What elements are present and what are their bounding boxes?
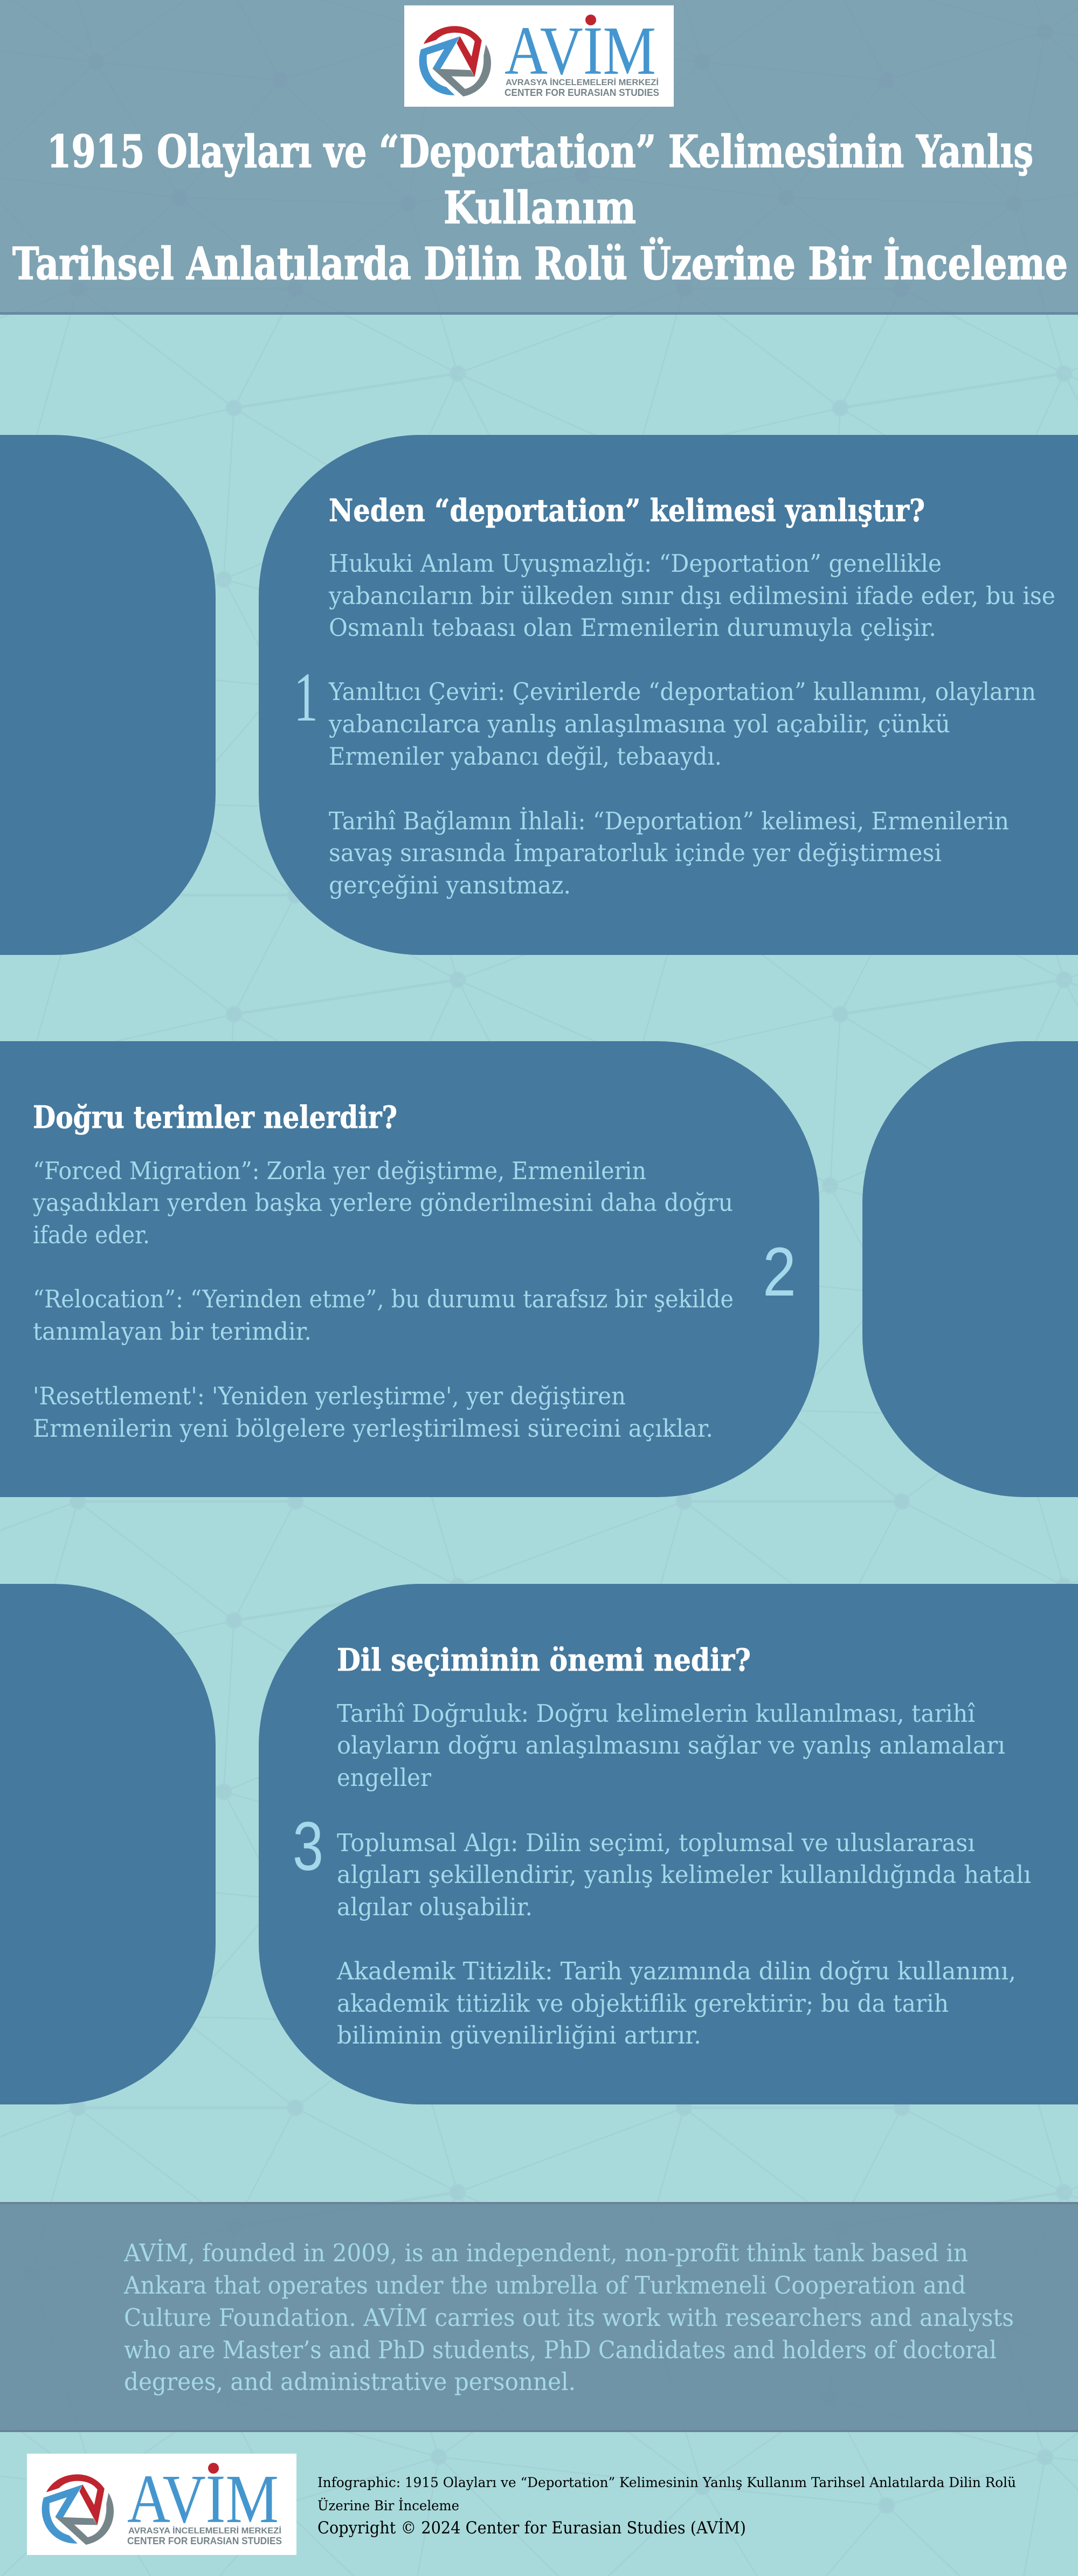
text: section 1 body: savaş sırasında İmparatorluk içinde yer değiştirmesi bbox=[329, 839, 942, 867]
panel: section 2 bbox=[0, 1041, 819, 1497]
text: section 2 body: tanımlayan bir terimdir. bbox=[33, 1317, 312, 1346]
number 1: 1 bbox=[294, 659, 318, 736]
text: section 1 body: Tarihî Bağlamın İhlali: “Deportation” kelimesi, Ermenilerin bbox=[329, 807, 1009, 835]
logo: header AVİM: CENTER FOR EURASIAN STUDIES bbox=[505, 87, 659, 98]
text: section 1 body: Osmanlı tebaası olan Ermenilerin durumuyla çelişir. bbox=[329, 613, 936, 642]
number 3: 3 bbox=[293, 1808, 323, 1885]
logo: header AVİM: AVİM bbox=[505, 12, 656, 89]
footer credit text bbox=[317, 2475, 1016, 2538]
text: section 3 body bbox=[336, 1699, 1031, 2049]
text: section 1 body: Yanıltıcı Çeviri: Çevirilerde “deportation” kullanımı, olayların bbox=[328, 677, 1036, 706]
text: section 1 body: yabancılarca yanlış anlaşılmasına yol açabilir, çünkü bbox=[328, 710, 950, 738]
text: section 2 body: ifade eder. bbox=[33, 1221, 150, 1249]
text: about AVİM bbox=[123, 2239, 1014, 2396]
panel: section 1 bbox=[259, 435, 1078, 955]
text: section 1 body: Hukuki Anlam Uyuşmazlığı: “Deportation” genellikle bbox=[329, 549, 942, 578]
text: section 3 body: biliminin güvenilirliğini artırır. bbox=[337, 2021, 701, 2049]
panel: header band bbox=[0, 0, 1078, 315]
text: about AVİM: AVİM, founded in 2009, is an independent, non-profit think tank based in bbox=[123, 2239, 968, 2267]
logo: footer AVİM: AVİM bbox=[127, 2461, 279, 2537]
footer credit text: Infographic: 1915 Olayları ve “Deportation” Kelimesinin Yanlış Kullanım Tarihsel Anlatılarda Dilin Rolü bbox=[317, 2475, 1016, 2490]
title bbox=[12, 126, 1068, 290]
heading: section 2: Doğru terimler nelerdir? bbox=[33, 1099, 397, 1135]
footer credit text: Copyright © 2024 Center for Eurasian Studies (AVİM) bbox=[317, 2517, 746, 2538]
text: section 3 body: engeller bbox=[337, 1763, 431, 1792]
logo: footer AVİM: AVRASYA İNCELEMELERİ MERKEZİ bbox=[128, 2526, 281, 2536]
panel: about band bbox=[0, 2202, 1078, 2432]
logo: header AVİM: AVRASYA İNCELEMELERİ MERKEZİ bbox=[506, 78, 659, 87]
text: about AVİM: who are Master’s and PhD students, PhD Candidates and holders of doctoral bbox=[124, 2336, 997, 2364]
text: section 3 body: algıları şekillendirir, yanlış kelimeler kullanıldığında hatalı bbox=[337, 1860, 1031, 1889]
text: section 2 body bbox=[32, 1157, 734, 1443]
footer credit text: Üzerine Bir İnceleme bbox=[317, 2498, 459, 2513]
text: section 3 body: algılar oluşabilir. bbox=[337, 1893, 533, 1921]
text: about AVİM: Culture Foundation. AVİM carries out its work with researchers and analysts bbox=[124, 2303, 1014, 2332]
text: section 3 body: olayların doğru anlaşılmasını sağlar ve yanlış anlamaları bbox=[337, 1731, 1005, 1760]
text: section 1 body: yabancıların bir ülkeden sınır dışı edilmesini ifade eder, bu ise bbox=[328, 581, 1055, 610]
heading: section 3: Dil seçiminin önemi nedir? bbox=[337, 1642, 751, 1678]
logo: header AVİM bbox=[404, 5, 674, 107]
text: section 3 body: Toplumsal Algı: Dilin seçimi, toplumsal ve uluslararası bbox=[337, 1829, 975, 1857]
text: section 1 body bbox=[328, 549, 1055, 899]
text: section 2 body: 'Resettlement': 'Yeniden yerleştirme', yer değiştiren bbox=[33, 1382, 626, 1410]
number 2: 2 bbox=[763, 1234, 796, 1311]
text: section 3 body: akademik titizlik ve objektiflik gerektirir; bu da tarih bbox=[337, 1989, 949, 2018]
title: Kullanım bbox=[444, 182, 636, 234]
heading: section 1: Neden “deportation” kelimesi yanlıştır? bbox=[329, 493, 925, 529]
text: about AVİM: degrees, and administrative personnel. bbox=[124, 2367, 576, 2396]
text: section 1 body: gerçeğini yansıtmaz. bbox=[329, 871, 571, 899]
panel: section 3 bbox=[259, 1584, 1078, 2104]
text: section 2 body: yaşadıkları yerden başka yerlere gönderilmesini daha doğru bbox=[32, 1188, 733, 1217]
text: section 3 body: Tarihî Doğruluk: Doğru kelimelerin kullanılması, tarihî bbox=[337, 1699, 976, 1728]
logo: footer AVİM: CENTER FOR EURASIAN STUDIES bbox=[127, 2535, 282, 2546]
text: section 2 body: “Forced Migration”: Zorla yer değiştirme, Ermenilerin bbox=[33, 1157, 646, 1185]
logo: footer AVİM bbox=[27, 2454, 296, 2555]
text: section 2 body: “Relocation”: “Yerinden etme”, bu durumu tarafsız bir şekilde bbox=[33, 1285, 734, 1313]
panel: section 1 side block bbox=[0, 435, 216, 955]
text: section 1 body: Ermeniler yabancı değil, tebaaydı. bbox=[329, 742, 722, 771]
panel: section 3 side block bbox=[0, 1584, 216, 2104]
text: section 2 body: Ermenilerin yeni bölgelere yerleştirilmesi sürecini açıklar. bbox=[33, 1414, 713, 1443]
panel: section 2 side block bbox=[862, 1041, 1078, 1497]
text: section 3 body: Akademik Titizlik: Tarih yazımında dilin doğru kullanımı, bbox=[336, 1957, 1016, 1985]
text: about AVİM: Ankara that operates under the umbrella of Turkmeneli Cooperation and bbox=[123, 2271, 966, 2300]
